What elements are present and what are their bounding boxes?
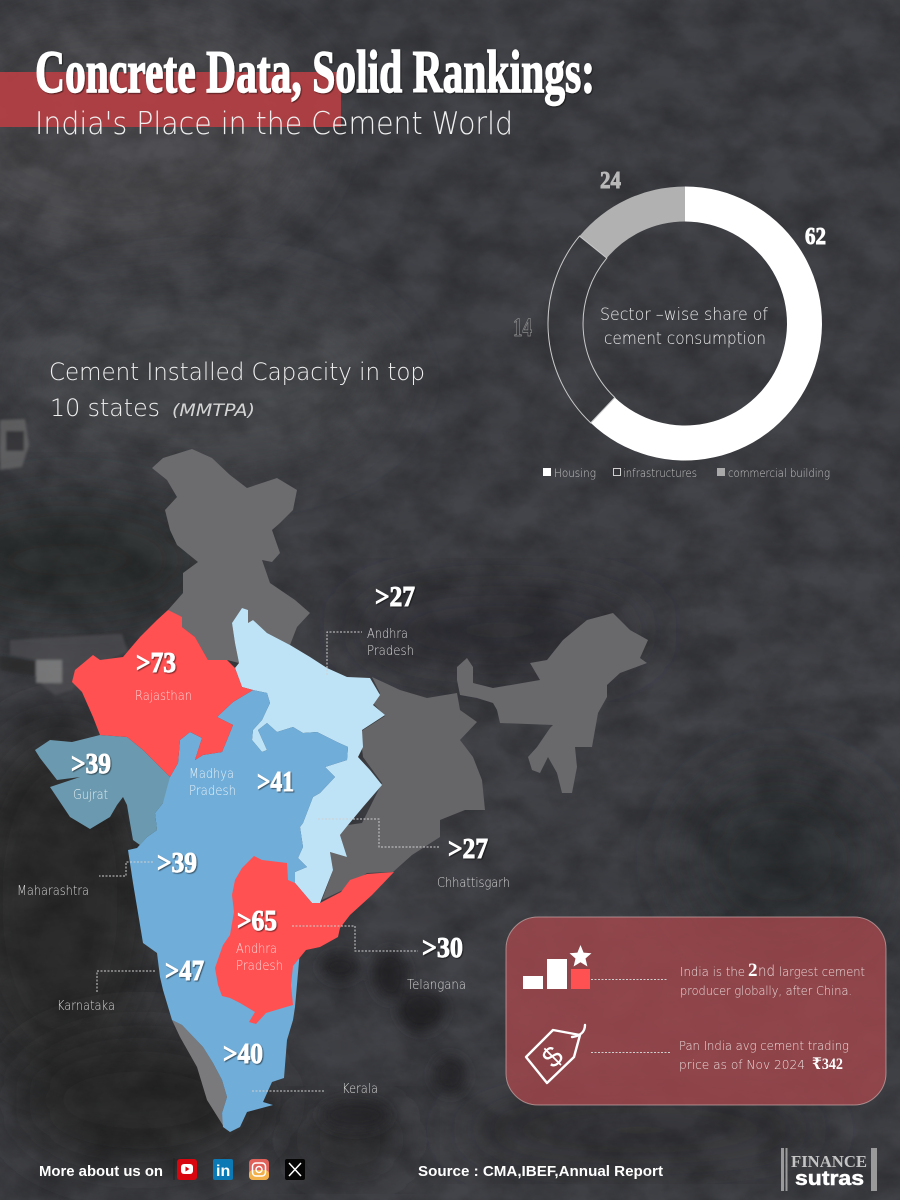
fact: average price: Pan India avg cement trading [679, 1038, 849, 1053]
panel: key facts [506, 917, 886, 1105]
logo: Finance Sutras [781, 1148, 877, 1191]
fact: average price: price as of Nov 2024 [679, 1057, 805, 1072]
state group: north-east grey [457, 613, 648, 793]
icon: LinkedIn [213, 1159, 233, 1180]
state names: Andhra [367, 627, 408, 642]
state: Gujarat, teal [35, 735, 170, 845]
donut segment: housing 62 [591, 186, 822, 460]
fact: second largest producer: 2 [748, 960, 758, 981]
logo: Finance Sutras: FINANCE [791, 1152, 867, 1171]
state group: Madhya Pradesh, Maharashtra, Karnataka, Tamil Nadu, blue [128, 690, 348, 1132]
panel: donut chart of sector-wise share [513, 168, 830, 480]
value: Chhattisgarh: >27 [448, 833, 488, 865]
state names [17, 627, 510, 1097]
state: Kerala grey [172, 1020, 227, 1127]
donut segment: infrastructures 14 [548, 236, 615, 423]
heading: installed capacity: 10 states [50, 394, 160, 422]
value 24: 24 [600, 168, 621, 194]
icon: X [285, 1159, 305, 1180]
state names: Maharashtra [17, 884, 89, 899]
state names: Rajasthan [135, 689, 192, 704]
background: excavators [0, 419, 128, 695]
icon: price tag: $ [536, 1040, 570, 1074]
source: Source : CMA,IBEF,Annual Report [418, 1163, 663, 1180]
data labels [71, 581, 488, 1070]
heading: installed capacity: Cement Installed Capacity in top [49, 358, 425, 386]
legend [543, 466, 830, 480]
icon: price tag [526, 1025, 585, 1083]
value: Rajasthan: >73 [136, 647, 176, 679]
value: Madhya Pradesh: >41 [257, 766, 294, 798]
state group: north grey [152, 449, 310, 663]
fact: average price [679, 1038, 849, 1073]
value: Telangana: >30 [422, 932, 463, 964]
fact: second largest producer: India is the [680, 964, 745, 979]
donut centre label [600, 305, 768, 348]
state names: Pradesh [189, 784, 236, 799]
donut centre label: Sector –wise share of [600, 305, 768, 324]
value 14: 14 [513, 313, 532, 342]
fact: second largest producer [680, 960, 865, 998]
icon: YouTube [177, 1159, 197, 1180]
state names: Pradesh [236, 959, 283, 974]
fact: second largest producer: nd [758, 962, 775, 980]
subtitle: India's Place in the Cement World [35, 106, 513, 142]
donut centre label: cement consumption [604, 329, 766, 348]
fact: second largest producer: producer globally, after China. [680, 983, 852, 998]
state names: Chhattisgarh [437, 876, 510, 891]
state names: Telangana [407, 978, 466, 993]
value: Andhra Pradesh: >65 [237, 905, 277, 937]
state names: Gujrat [73, 788, 108, 803]
value: Kerala: >40 [223, 1038, 263, 1070]
heading: installed capacity [49, 358, 425, 422]
icon: Instagram [249, 1159, 269, 1180]
value: Karnataka: >47 [165, 955, 204, 987]
dashed leaders [591, 978, 668, 980]
state names: Kerala [342, 1082, 378, 1097]
state names: Madhya [189, 767, 234, 782]
heading: installed capacity: (MMTPA) [172, 401, 255, 421]
icon: ranking bars with star [523, 945, 592, 989]
logo: Finance Sutras: sutras [795, 1168, 864, 1190]
legend: infrastructures [623, 466, 697, 480]
value: Gujarat: >39 [71, 748, 111, 780]
value 62: 62 [805, 224, 826, 250]
state names: Andhra [236, 942, 277, 957]
legend: Housing [554, 466, 596, 480]
connector lines [97, 632, 440, 1091]
icon: LinkedIn: in [216, 1163, 230, 1180]
state: Uttar Pradesh and Chhattisgarh, light blue [232, 608, 385, 903]
state names: Karnataka [57, 999, 115, 1014]
value: Andhra Pradesh top: >27 [375, 581, 415, 613]
footer: social links: More about us on [39, 1163, 163, 1180]
donut segment: commercial building 24 [580, 186, 685, 258]
state: Rajasthan, red [72, 610, 253, 777]
state: Andhra Pradesh and Telangana, red [215, 856, 394, 1024]
fact: average price: ₹342 [812, 1056, 843, 1073]
title: Concrete Data, Solid Rankings: [35, 39, 595, 105]
fact: second largest producer: largest cement [779, 964, 865, 979]
state names: Pradesh [367, 644, 414, 659]
footer: social links [39, 1158, 305, 1180]
legend: commercial building [728, 466, 830, 480]
value: Maharashtra: >39 [157, 847, 197, 879]
state group: east grey [322, 677, 485, 900]
map of India [35, 449, 648, 1132]
red title band [0, 72, 341, 127]
